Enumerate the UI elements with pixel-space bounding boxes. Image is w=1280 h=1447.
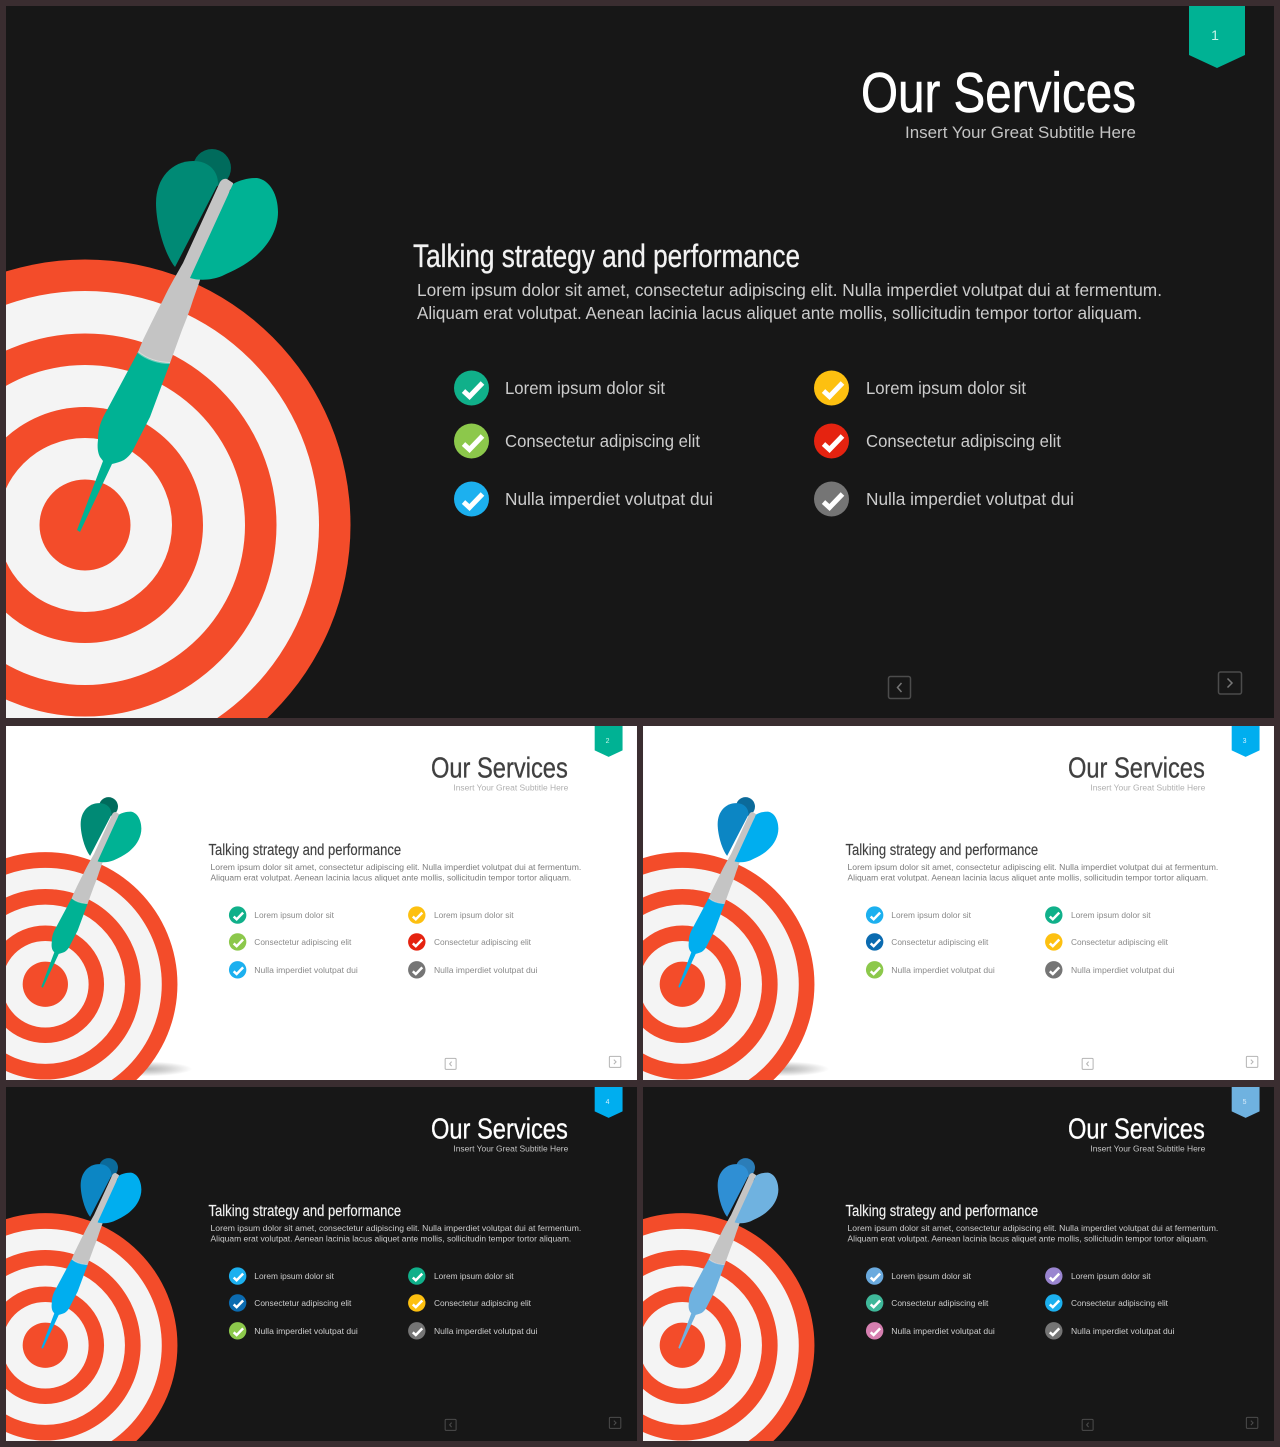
heading: Talking strategy and performance bbox=[846, 842, 1038, 859]
checklist bbox=[866, 906, 1175, 979]
subtitle: Insert Your Great Subtitle Here bbox=[905, 123, 1136, 142]
body text: Aliquam erat volutpat. Aenean lacinia lacus aliquet ante mollis, sollicitudin tempor tortor aliquam. bbox=[417, 303, 1142, 323]
nav arrows bbox=[1082, 1056, 1258, 1069]
checklist: Consectetur adipiscing elit bbox=[434, 937, 532, 947]
title: Our Services bbox=[1068, 753, 1205, 785]
checklist: Lorem ipsum dolor sit bbox=[254, 1271, 335, 1281]
checklist: Nulla imperdiet volutpat dui bbox=[891, 1326, 995, 1336]
checklist: Lorem ipsum dolor sit bbox=[891, 910, 972, 920]
checklist: Lorem ipsum dolor sit bbox=[254, 910, 335, 920]
panel: slide 3 light blue bbox=[643, 726, 1274, 1080]
body text bbox=[848, 862, 1218, 883]
badge: page number bbox=[1232, 1087, 1260, 1118]
checklist: Consectetur adipiscing elit bbox=[434, 1298, 532, 1308]
body text: Aliquam erat volutpat. Aenean lacinia lacus aliquet ante mollis, sollicitudin tempor tortor aliquam. bbox=[848, 873, 1208, 883]
title: Our Services bbox=[1068, 1114, 1205, 1146]
target bbox=[0, 852, 177, 1116]
checklist bbox=[229, 1267, 538, 1340]
checklist bbox=[229, 906, 538, 979]
body text bbox=[211, 1223, 581, 1244]
badge: page number: 1 bbox=[1211, 27, 1219, 43]
body text bbox=[211, 862, 581, 883]
icon: dart bbox=[41, 1158, 141, 1349]
body text: Aliquam erat volutpat. Aenean lacinia lacus aliquet ante mollis, sollicitudin tempor tortor aliquam. bbox=[211, 1234, 571, 1244]
icon: dart bbox=[678, 1158, 778, 1349]
title: Our Services bbox=[431, 753, 568, 785]
badge: page number bbox=[595, 1087, 623, 1118]
checklist: Lorem ipsum dolor sit bbox=[505, 378, 665, 398]
heading: Talking strategy and performance bbox=[209, 842, 401, 859]
body text: Lorem ipsum dolor sit amet, consectetur adipiscing elit. Nulla imperdiet volutpat dui at fermentum. bbox=[417, 280, 1162, 300]
checklist: Nulla imperdiet volutpat dui bbox=[434, 1326, 538, 1336]
nav arrows bbox=[1082, 1417, 1258, 1430]
icon: dart bbox=[77, 149, 278, 532]
target shadow bbox=[735, 1061, 829, 1076]
checklist: Nulla imperdiet volutpat dui bbox=[866, 489, 1074, 509]
subtitle: Insert Your Great Subtitle Here bbox=[453, 783, 569, 793]
heading: Talking strategy and performance bbox=[413, 238, 800, 274]
checklist bbox=[866, 1267, 1175, 1340]
badge: page number: 3 bbox=[1243, 738, 1247, 745]
badge: page number bbox=[595, 726, 623, 757]
checklist: Lorem ipsum dolor sit bbox=[434, 1271, 514, 1281]
target bbox=[0, 260, 350, 790]
checklist: Nulla imperdiet volutpat dui bbox=[254, 965, 358, 975]
checklist: Consectetur adipiscing elit bbox=[866, 431, 1061, 451]
badge: page number bbox=[1189, 6, 1245, 68]
checklist: Consectetur adipiscing elit bbox=[254, 1298, 352, 1308]
body text: Lorem ipsum dolor sit amet, consectetur adipiscing elit. Nulla imperdiet volutpat dui at fermentum. bbox=[211, 862, 581, 872]
badge: page number: 5 bbox=[1243, 1099, 1247, 1106]
badge: page number: 4 bbox=[606, 1099, 610, 1106]
checklist: Consectetur adipiscing elit bbox=[891, 1298, 989, 1308]
checklist: Consectetur adipiscing elit bbox=[1071, 937, 1169, 947]
checklist bbox=[454, 370, 1074, 516]
checklist: Lorem ipsum dolor sit bbox=[866, 378, 1026, 398]
checklist: Lorem ipsum dolor sit bbox=[434, 910, 514, 920]
icon: dart bbox=[41, 797, 141, 988]
target bbox=[0, 1213, 177, 1447]
checklist: Nulla imperdiet volutpat dui bbox=[891, 965, 995, 975]
target shadow bbox=[98, 1061, 192, 1076]
target bbox=[550, 1213, 814, 1447]
checklist: Consectetur adipiscing elit bbox=[505, 431, 700, 451]
checklist: Lorem ipsum dolor sit bbox=[1071, 910, 1151, 920]
checklist: Consectetur adipiscing elit bbox=[1071, 1298, 1169, 1308]
checklist: Nulla imperdiet volutpat dui bbox=[254, 1326, 358, 1336]
body text: Lorem ipsum dolor sit amet, consectetur adipiscing elit. Nulla imperdiet volutpat dui at fermentum. bbox=[848, 862, 1218, 872]
icon: dart bbox=[678, 797, 778, 988]
panel: slide 5 dark pale blue bbox=[643, 1087, 1274, 1441]
checklist: Consectetur adipiscing elit bbox=[891, 937, 989, 947]
badge: page number bbox=[1232, 726, 1260, 757]
body text: Lorem ipsum dolor sit amet, consectetur adipiscing elit. Nulla imperdiet volutpat dui at fermentum. bbox=[848, 1223, 1218, 1233]
checklist: Nulla imperdiet volutpat dui bbox=[1071, 1326, 1175, 1336]
body text: Lorem ipsum dolor sit amet, consectetur adipiscing elit. Nulla imperdiet volutpat dui at fermentum. bbox=[211, 1223, 581, 1233]
badge: page number: 2 bbox=[606, 738, 610, 745]
body text: Aliquam erat volutpat. Aenean lacinia lacus aliquet ante mollis, sollicitudin tempor tortor aliquam. bbox=[211, 873, 571, 883]
nav arrows bbox=[445, 1417, 621, 1430]
title: Our Services bbox=[861, 61, 1136, 125]
nav arrows bbox=[888, 672, 1242, 698]
checklist: Consectetur adipiscing elit bbox=[254, 937, 352, 947]
checklist: Nulla imperdiet volutpat dui bbox=[1071, 965, 1175, 975]
body text bbox=[848, 1223, 1218, 1244]
subtitle: Insert Your Great Subtitle Here bbox=[453, 1144, 569, 1154]
checklist: Lorem ipsum dolor sit bbox=[891, 1271, 972, 1281]
checklist: Lorem ipsum dolor sit bbox=[1071, 1271, 1151, 1281]
subtitle: Insert Your Great Subtitle Here bbox=[1090, 1144, 1206, 1154]
panel: slide 1 large dark bbox=[6, 6, 1274, 718]
body text bbox=[417, 280, 1162, 323]
panel: slide 2 light green bbox=[6, 726, 637, 1080]
panel: slide 4 dark blue bbox=[6, 1087, 637, 1441]
checklist: Nulla imperdiet volutpat dui bbox=[505, 489, 713, 509]
title: Our Services bbox=[431, 1114, 568, 1146]
target bbox=[550, 852, 814, 1116]
checklist: Nulla imperdiet volutpat dui bbox=[434, 965, 538, 975]
heading: Talking strategy and performance bbox=[209, 1203, 401, 1220]
body text: Aliquam erat volutpat. Aenean lacinia lacus aliquet ante mollis, sollicitudin tempor tortor aliquam. bbox=[848, 1234, 1208, 1244]
subtitle: Insert Your Great Subtitle Here bbox=[1090, 783, 1206, 793]
nav arrows bbox=[445, 1056, 621, 1069]
heading: Talking strategy and performance bbox=[846, 1203, 1038, 1220]
